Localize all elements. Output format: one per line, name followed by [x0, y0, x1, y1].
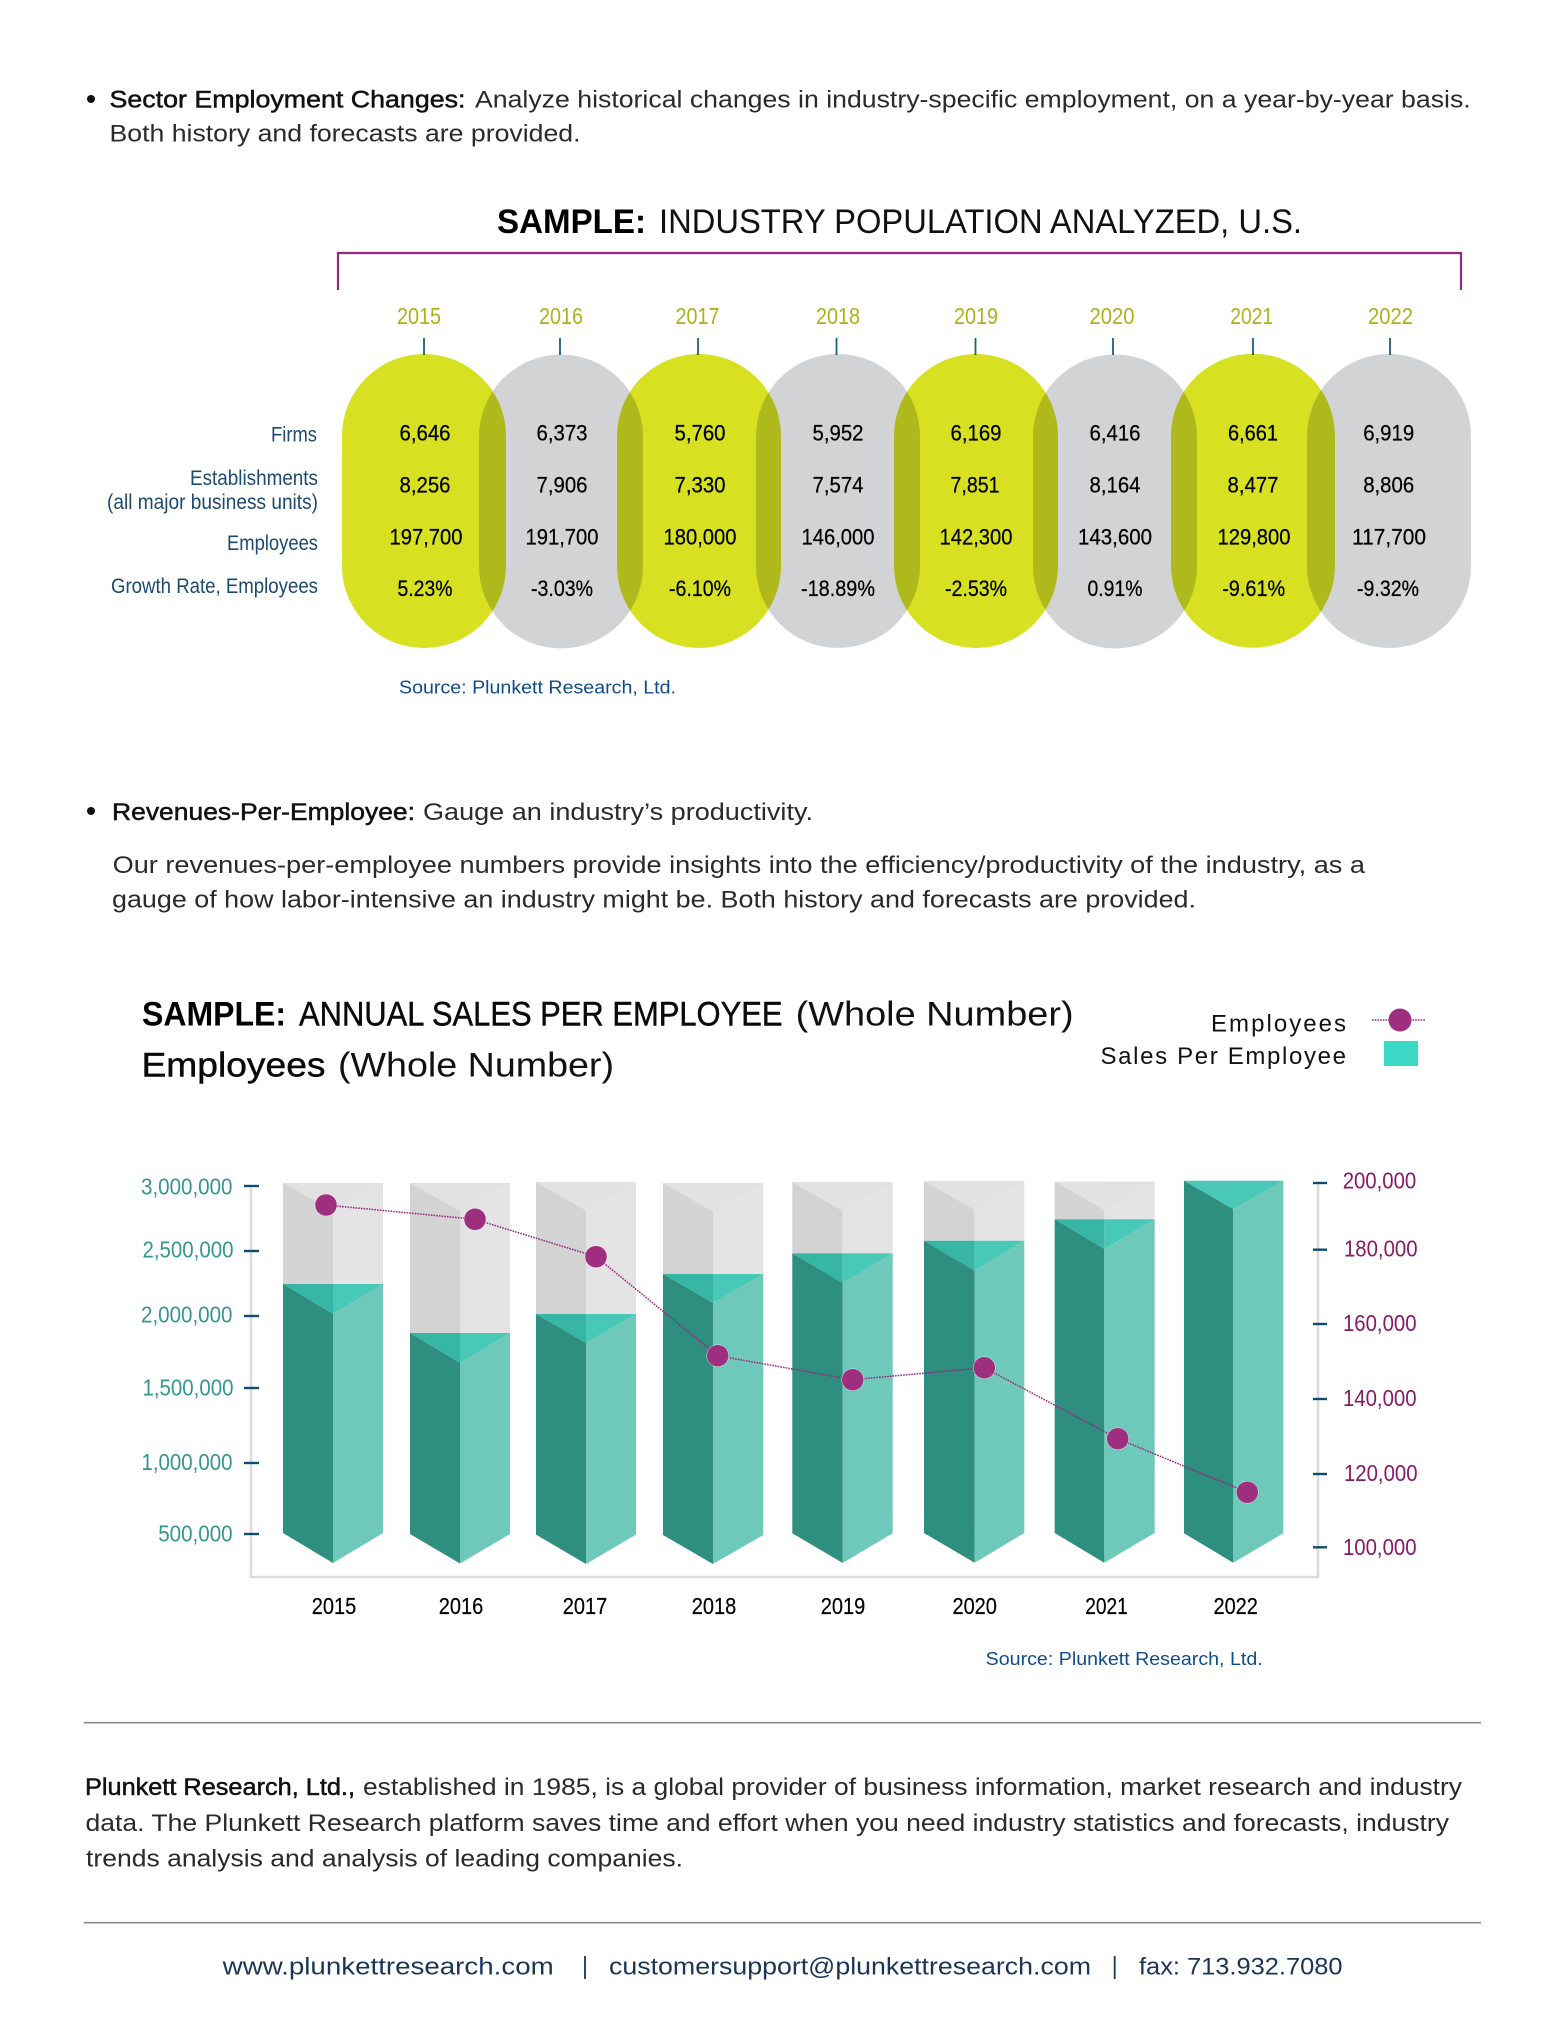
pill column: 2018: -18.89%: [801, 576, 875, 601]
pill column: 2021: 6,661: [1228, 421, 1278, 446]
pill column: 2019: 7,851: [950, 472, 1000, 497]
left axis: 2,000,000: [141, 1302, 232, 1328]
pill column: 2016: [479, 303, 643, 648]
row labels: Firms: [271, 424, 317, 447]
text block: about Plunkett Research: Plunkett Research, Ltd.,: [85, 1774, 355, 1801]
pill column: 2018: [756, 303, 920, 648]
bar: 2021: [1055, 1182, 1155, 1563]
heading: industry population analyzed: INDUSTRY POPULATION ANALYZED, U.S.: [659, 203, 1302, 241]
pill column: 2019: -2.53%: [945, 576, 1007, 601]
pill column: 2017: -6.10%: [669, 576, 731, 601]
x axis year labels: 2020: [952, 1593, 997, 1619]
pill column: 2017: 5,760: [674, 421, 726, 446]
x axis year labels: 2017: [563, 1593, 607, 1619]
x axis year labels: 2021: [1085, 1593, 1128, 1619]
heading: annual sales per employee: ANNUAL SALES PER EMPLOYEE: [299, 996, 782, 1034]
pill column: 2016: 2016: [539, 303, 583, 329]
left axis: 3,000,000: [141, 1173, 232, 1199]
pill column: 2022: 2022: [1368, 303, 1413, 329]
pill column: 2015: 8,256: [400, 472, 450, 497]
text block: sector employment changes: [87, 87, 1471, 148]
text block: about Plunkett Research: [85, 1774, 1463, 1873]
right axis: [1313, 1167, 1418, 1560]
x axis year labels: 2018: [692, 1593, 736, 1619]
heading: annual sales per employee: Employees: [142, 1047, 326, 1085]
pill column: 2015: 197,700: [390, 524, 462, 549]
text block: about Plunkett Research: trends analysis and analysis of leading companies.: [86, 1846, 683, 1873]
source note: population table: Source: Plunkett Research, Ltd.: [399, 678, 676, 698]
text block: sector employment changes: Analyze historical changes in industry-specific employment, on a year-by-year basis.: [475, 87, 1471, 114]
source note: sales chart: Source: Plunkett Research, Ltd.: [986, 1649, 1263, 1669]
pill column: 2016: 7,906: [536, 472, 588, 497]
row labels: (all major business units): [107, 491, 318, 514]
pill column: 2016: 191,700: [526, 524, 598, 549]
pill column: 2020: 2020: [1090, 303, 1134, 329]
heading: annual sales per employee: (Whole Number): [338, 1047, 614, 1085]
row labels: Growth Rate, Employees: [111, 575, 318, 598]
pill column: 2017: 180,000: [664, 524, 736, 549]
pill column: 2019: 2019: [954, 303, 998, 329]
right axis: 200,000: [1343, 1167, 1416, 1193]
pill column: 2021: 129,800: [1218, 524, 1290, 549]
pill column: 2022: 8,806: [1363, 472, 1414, 497]
chart axes: [251, 1183, 1318, 1577]
right axis: 100,000: [1343, 1534, 1416, 1560]
legend: Employees: [1211, 1011, 1346, 1038]
pill column: 2018: 5,952: [812, 421, 864, 446]
text block: sector employment changes: Both history and forecasts are provided.: [110, 121, 580, 148]
legend: [1100, 1008, 1425, 1070]
pill column: 2015: 2015: [397, 303, 441, 329]
bar: 2019: [792, 1182, 893, 1563]
bar: 2020: [924, 1181, 1024, 1563]
left axis: 500,000: [158, 1521, 233, 1547]
row labels: Establishments: [190, 467, 318, 490]
bracket: [338, 253, 1461, 290]
pill column: 2021: [1171, 303, 1335, 648]
pill column: 2020: 6,416: [1090, 421, 1140, 446]
bar: 2018: [663, 1183, 763, 1564]
text block: sector employment changes: Sector Employment Changes:: [110, 87, 466, 114]
text block: revenues per employee: Our revenues-per-employee numbers provide insights into the efficiency/productivity of the industry, as a: [113, 852, 1365, 879]
text block: revenues per employee: gauge of how labor-intensive an industry might be. Both history and forecasts are provided.: [112, 887, 1196, 914]
bar: 2015: [283, 1183, 383, 1563]
pill column: 2017: 7,330: [674, 472, 726, 497]
pill column: 2019: 142,300: [940, 524, 1012, 549]
right axis: 160,000: [1343, 1310, 1416, 1336]
right axis: 120,000: [1344, 1460, 1418, 1486]
row labels: [107, 424, 318, 598]
heading: annual sales per employee: (Whole Number): [796, 996, 1074, 1034]
left axis: 1,500,000: [142, 1375, 234, 1401]
pill column: 2017: [617, 303, 781, 648]
text block: about Plunkett Research: established in 1985, is a global provider of business information, market research and industry: [363, 1774, 1463, 1801]
pill column: 2022: 6,919: [1363, 421, 1414, 446]
pill column: 2015: 6,646: [400, 421, 450, 446]
pill column: 2021: -9.61%: [1222, 576, 1285, 601]
x axis year labels: 2016: [439, 1593, 483, 1619]
footer contact line: fax: 713.932.7080: [1139, 1953, 1342, 1980]
pill column: 2020: 8,164: [1090, 472, 1140, 497]
pill column: 2018: 146,000: [802, 524, 874, 549]
pill column: 2015: [342, 303, 506, 648]
pill column: 2022: 117,700: [1352, 524, 1426, 549]
employees line series: [315, 1194, 1258, 1503]
row labels: Employees: [227, 532, 318, 555]
x axis year labels: 2019: [821, 1593, 865, 1619]
pill column: 2019: [894, 303, 1058, 648]
heading: industry population analyzed: SAMPLE:: [497, 203, 646, 241]
right axis: 180,000: [1344, 1236, 1418, 1262]
text block: revenues per employee: Revenues-Per-Employee:: [112, 799, 415, 826]
pill column: 2015: 5.23%: [398, 576, 452, 601]
left axis: 1,000,000: [142, 1449, 232, 1475]
bar: 2022: [1184, 1181, 1283, 1563]
pill column: 2021: 2021: [1230, 303, 1273, 329]
text block: revenues per employee: Gauge an industry’s productivity.: [423, 799, 813, 826]
right axis: 140,000: [1343, 1385, 1416, 1411]
bar: 2017: [536, 1182, 636, 1564]
text block: revenues per employee: [87, 799, 1365, 914]
left axis: 2,500,000: [142, 1237, 234, 1263]
pill column: 2018: 7,574: [812, 472, 864, 497]
x axis year labels: 2015: [312, 1593, 356, 1619]
heading: annual sales per employee: [142, 996, 1074, 1085]
footer contact line: customersupport@plunkettresearch.com: [609, 1953, 1091, 1980]
x axis year labels: [312, 1593, 1258, 1619]
bar: 2016: [410, 1183, 510, 1564]
left axis: [141, 1173, 259, 1547]
pill column: 2019: 6,169: [950, 421, 1002, 446]
pill column: 2022: [1307, 303, 1471, 648]
pill column: 2021: 8,477: [1228, 472, 1278, 497]
x axis year labels: 2022: [1213, 1593, 1258, 1619]
pill column: 2022: -9.32%: [1357, 576, 1419, 601]
pill column: 2020: 143,600: [1078, 524, 1152, 549]
text block: about Plunkett Research: data. The Plunkett Research platform saves time and effort when you need industry statistics and forecasts, industry: [86, 1810, 1450, 1837]
pill column: 2016: 6,373: [536, 421, 588, 446]
heading: annual sales per employee: SAMPLE:: [142, 996, 286, 1034]
pill column: 2016: -3.03%: [531, 576, 593, 601]
pill column: 2020: [1033, 303, 1197, 648]
legend: Sales Per Employee: [1100, 1043, 1346, 1070]
pill column: 2017: 2017: [676, 303, 720, 329]
footer contact line: www.plunkettresearch.com: [222, 1953, 554, 1980]
footer contact line: [222, 1953, 1343, 1980]
pill column: 2020: 0.91%: [1088, 576, 1142, 601]
pill column: 2018: 2018: [816, 303, 860, 329]
